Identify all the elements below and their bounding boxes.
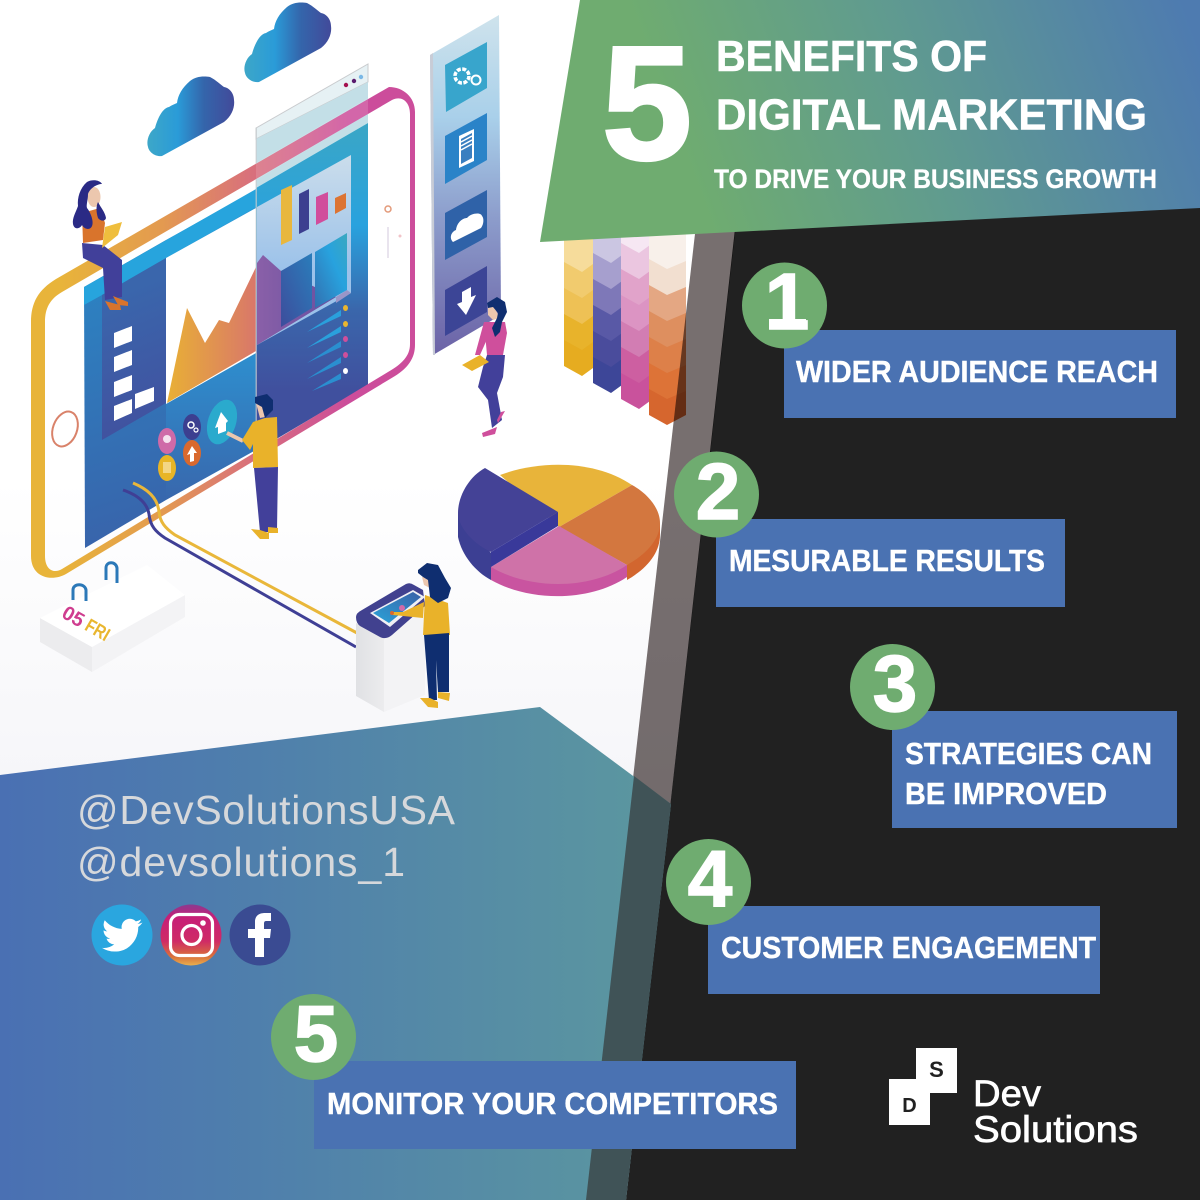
person: woman sitting on frame: [73, 180, 128, 310]
tall icon panel: [430, 15, 501, 355]
social handles: @devsolutions_1: [77, 839, 405, 885]
title line 1: BENEFITS OF: [716, 32, 987, 81]
illustration: digital marketing scene: [31, 2, 686, 712]
list rows with dots: [307, 305, 348, 391]
benefit 2: [674, 447, 1065, 607]
person: woman at kiosk: [390, 563, 451, 708]
icon: instagram: [160, 904, 222, 966]
benefit 3: 3: [873, 639, 917, 728]
cables to kiosk: [123, 483, 357, 647]
frame tint inside window: [256, 98, 368, 180]
calendar: 05: [58, 602, 88, 632]
benefit 3: STRATEGIES CAN: [905, 736, 1152, 771]
benefit 1: 1: [765, 257, 809, 346]
app icons: [158, 396, 242, 481]
person: woman holding tablet: [462, 297, 507, 437]
dark right panel: [626, 200, 1200, 1200]
pie chart: [458, 465, 660, 596]
benefit 3: [850, 639, 1177, 828]
sidebar tiles: [114, 326, 154, 421]
person: man touching screen: [227, 394, 278, 539]
benefit 2: 2: [696, 447, 740, 536]
window: left edge: [256, 128, 257, 451]
window: right screen area: [256, 123, 368, 451]
benefit 5: 5: [294, 989, 338, 1078]
calendar: FRI: [81, 615, 113, 646]
subtitle: TO DRIVE YOUR BUSINESS GROWTH: [714, 164, 1157, 194]
bar blocks: pink column: [621, 232, 650, 409]
chart: mountain area: [167, 267, 256, 403]
screen: cyan header strip: [84, 189, 256, 305]
benefit 5: [271, 989, 796, 1149]
tile: cloud: [445, 190, 487, 260]
logo: Dev Solutions: Solutions: [973, 1109, 1138, 1150]
icon: cloud left: [147, 76, 234, 156]
benefit 5: MONITOR YOUR COMPETITORS: [327, 1086, 778, 1121]
band overlap shade: [586, 776, 671, 1200]
benefit 1: [742, 257, 1176, 418]
lilac panel corner: [336, 290, 351, 303]
bar blocks: yellow column: [564, 236, 593, 376]
header panel: [540, 0, 1200, 242]
logo: Dev Solutions: Dev: [973, 1073, 1042, 1114]
window: pale upper band: [256, 82, 368, 188]
window: title bar: [256, 64, 368, 139]
icon: twitter: [92, 904, 152, 966]
benefit 4: 4: [688, 834, 733, 923]
phone frame: [31, 87, 415, 578]
bar blocks: indigo column: [593, 234, 622, 393]
title line 2: DIGITAL MARKETING: [716, 90, 1147, 140]
benefit 1: WIDER AUDIENCE REACH: [796, 354, 1158, 389]
big number 5: 5: [602, 13, 692, 194]
kiosk: [356, 583, 425, 712]
grey diagonal band: [585, 225, 736, 1200]
tile: download arrow: [445, 266, 487, 336]
benefit 4: CUSTOMER ENGAGEMENT: [721, 930, 1096, 965]
benefit 4: [666, 834, 1100, 994]
bottom gradient panel: [0, 707, 671, 1200]
screen: left column: [84, 240, 166, 548]
bar blocks: orange column: [649, 232, 686, 425]
logo: Dev Solutions: S: [929, 1057, 944, 1082]
window control dots: [344, 75, 363, 87]
bar chart panel: [257, 155, 351, 345]
mountain continuing inside window: [257, 255, 336, 345]
phone camera marks: [385, 206, 402, 258]
tile: document: [445, 113, 487, 184]
icon: facebook: [230, 904, 290, 966]
bar chart: [281, 185, 346, 245]
icon: cloud right: [244, 2, 331, 82]
calendar: [40, 563, 185, 672]
social handles: [77, 787, 456, 885]
tile: gears: [445, 42, 487, 112]
screen: white chart area: [166, 208, 256, 404]
screen: centre area: [166, 190, 256, 500]
logo: Dev Solutions: D: [902, 1095, 917, 1117]
screen: dark side column: [102, 258, 166, 440]
panel tiles: [281, 233, 347, 327]
social handles: @DevSolutionsUSA: [77, 787, 456, 833]
benefit 2: MESURABLE RESULTS: [729, 543, 1045, 578]
benefit 3: BE IMPROVED: [905, 776, 1107, 811]
logo: Dev Solutions: [889, 1048, 1138, 1150]
phone home button: [48, 408, 82, 450]
